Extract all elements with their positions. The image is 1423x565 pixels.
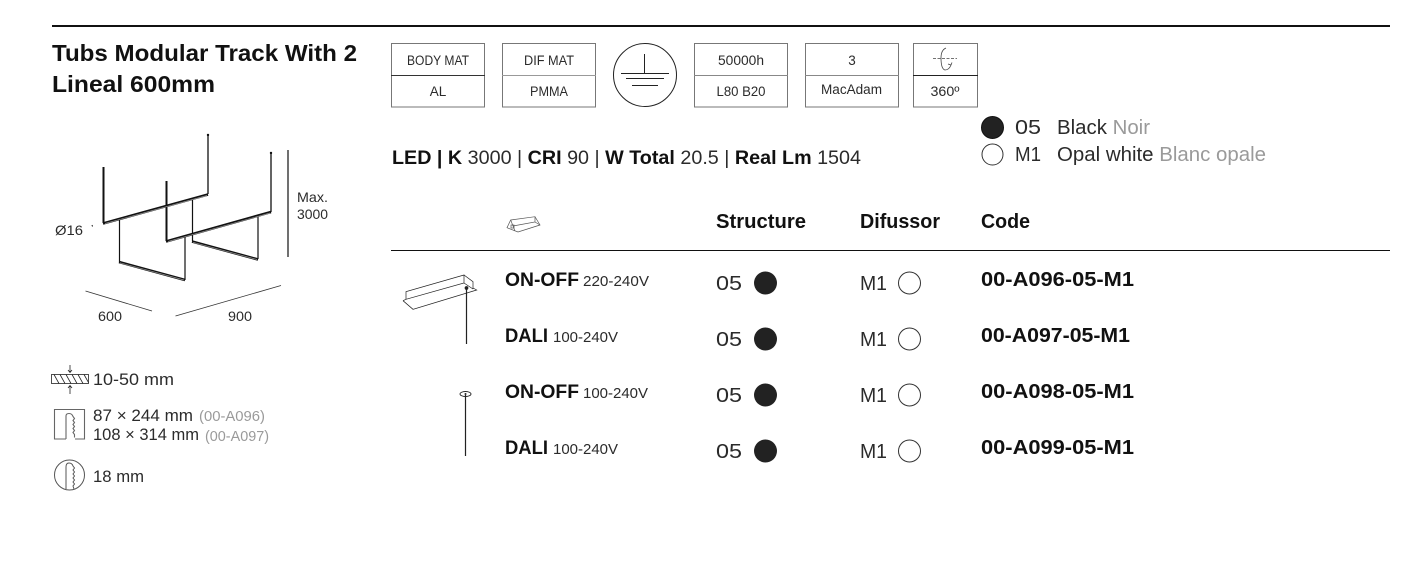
spec box: rotation	[913, 44, 978, 107]
row: 00-A096: ON-OFF	[505, 270, 579, 291]
dimension labels	[55, 189, 328, 324]
row: 00-A098: ON-OFF	[505, 382, 579, 403]
spec box: body material: AL	[430, 84, 447, 99]
row: 00-A096: 05	[716, 273, 742, 295]
dimension labels: Ø16	[55, 222, 83, 238]
row: 00-A099: 00-A099-05-M1	[981, 437, 1134, 459]
icon: rectangular cut-out	[54, 410, 84, 439]
table header	[716, 211, 1030, 233]
dimension labels: 900	[228, 308, 252, 324]
spec box: diffuser material: DIF MAT	[524, 53, 574, 68]
spec box: MacAdam: 3	[848, 53, 856, 68]
table header: Difussor	[860, 211, 940, 233]
dimension labels: 600	[98, 308, 122, 324]
LED specification line: LED | K 3000 | CRI 90 | W Total 20.5 | Real Lm 1504	[392, 147, 861, 169]
spec box: body material	[391, 44, 485, 107]
row: 00-A099: M1	[860, 441, 887, 463]
dimension labels: Max.	[297, 189, 328, 205]
icon: round cut-out	[54, 460, 84, 490]
spec box: rotation: 360º	[930, 84, 960, 99]
table header: Structure	[716, 211, 806, 233]
row: 00-A098: M1	[860, 385, 887, 407]
spec box: MacAdam: MacAdam	[821, 82, 882, 97]
icon: earth ground	[614, 44, 676, 106]
row: 00-A096	[505, 269, 1134, 295]
row: 00-A097: 00-A097-05-M1	[981, 325, 1130, 347]
ceiling thickness text: 10-50 mm	[93, 370, 174, 389]
title: Tubs Modular Track With 2	[52, 40, 357, 66]
cut-out sizes: (00-A097)	[205, 429, 269, 445]
colour legend: 05	[1015, 117, 1041, 139]
table header: Code	[981, 211, 1030, 233]
spec box: lifetime	[694, 44, 788, 107]
colour legend: Black Noir	[1057, 117, 1150, 139]
row: 00-A098	[505, 381, 1134, 407]
row: 00-A098: 00-A098-05-M1	[981, 381, 1134, 403]
dimension labels: 3000	[297, 206, 328, 222]
row: 00-A097: 05	[716, 329, 742, 351]
colour legend: M1	[1015, 144, 1041, 166]
spec box: diffuser material	[502, 44, 596, 107]
row: 00-A096: M1	[860, 273, 887, 295]
icon: surface canopy with cable	[403, 275, 477, 344]
title	[52, 40, 357, 97]
product dimension drawing	[86, 134, 288, 316]
row: 00-A099	[505, 437, 1134, 463]
spec box: diffuser material: PMMA	[530, 84, 568, 99]
icon: recessed canopy with cable	[460, 392, 471, 456]
row: 00-A099: 100-240V	[553, 441, 618, 458]
cut-out sizes: (00-A096)	[199, 409, 265, 425]
row: 00-A096: 220-240V	[583, 273, 649, 290]
cut-out sizes	[93, 406, 269, 445]
colour legend: Opal white Blanc opale	[1057, 144, 1266, 166]
row: 00-A098: 05	[716, 385, 742, 407]
cut-out sizes: 87 × 244 mm	[93, 406, 193, 425]
colour legend	[982, 116, 1266, 166]
spec box: body material: BODY MAT	[407, 53, 469, 68]
row: 00-A098: 100-240V	[583, 385, 648, 402]
icon: rotation	[933, 48, 957, 70]
round cut-out text: 18 mm	[93, 467, 144, 486]
icon: driver	[507, 217, 540, 232]
spec box: lifetime: 50000h	[718, 53, 764, 68]
row: 00-A099: DALI	[505, 438, 548, 459]
spec box: MacAdam	[805, 44, 899, 107]
row: 00-A097: 100-240V	[553, 329, 618, 346]
row: 00-A097: M1	[860, 329, 887, 351]
row: 00-A097: DALI	[505, 326, 548, 347]
cut-out sizes: 108 × 314 mm	[93, 425, 199, 444]
row: 00-A096: 00-A096-05-M1	[981, 269, 1134, 291]
spec box: lifetime: L80 B20	[716, 84, 766, 99]
row: 00-A097	[505, 325, 1130, 351]
title: Lineal 600mm	[52, 71, 215, 97]
icon: ceiling thickness	[52, 365, 88, 394]
row: 00-A099: 05	[716, 441, 742, 463]
